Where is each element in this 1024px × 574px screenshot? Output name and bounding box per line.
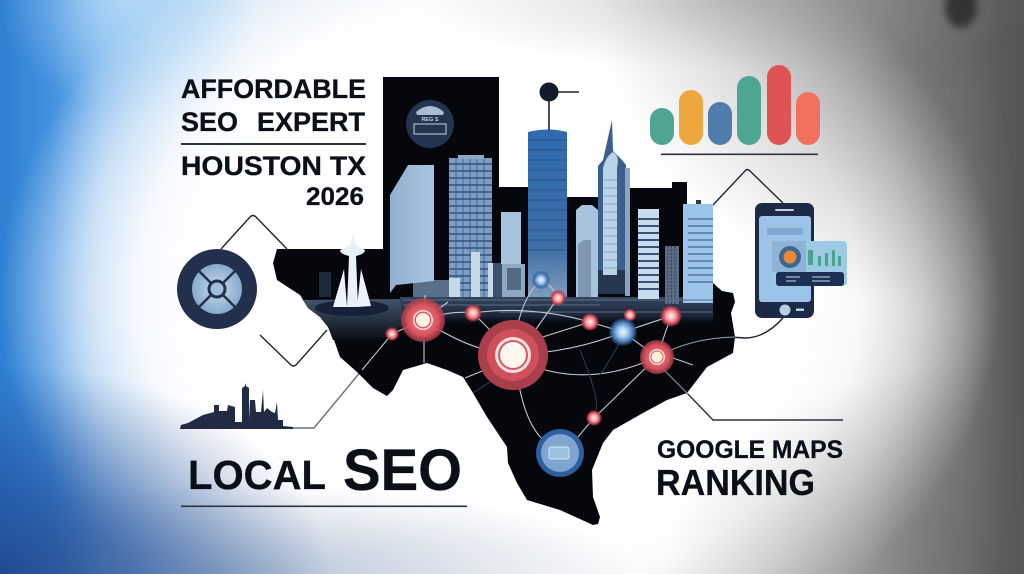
skyline buildings <box>319 82 713 312</box>
small tower <box>576 205 598 297</box>
heading: HOUSTON TX <box>181 151 366 181</box>
Google Maps ranking label: RANKING <box>656 462 815 503</box>
ground road <box>403 300 713 312</box>
network lines <box>362 280 735 445</box>
chart: coloured bars <box>650 65 820 155</box>
building left glass <box>390 165 434 293</box>
heading <box>181 74 366 211</box>
Google Maps ranking label: GOOGLE MAPS <box>657 436 843 464</box>
Google Maps ranking label <box>656 436 843 503</box>
low buildings <box>449 252 493 297</box>
local SEO label: LOCAL <box>188 452 326 498</box>
low slate blocks <box>413 280 449 297</box>
spire tower <box>598 120 630 296</box>
heading: AFFORDABLE <box>181 74 366 104</box>
app card <box>772 241 847 286</box>
connector lines <box>221 170 843 428</box>
city base haze <box>400 297 713 326</box>
phone icon <box>755 203 847 318</box>
node east <box>640 340 674 374</box>
background blocks <box>319 272 331 297</box>
small skyline silhouette <box>180 383 293 429</box>
smudge top right <box>945 0 977 28</box>
monument platform <box>303 299 404 340</box>
location badge node <box>536 429 584 477</box>
main blue tower <box>528 130 567 297</box>
heading: EXPERT <box>257 107 366 137</box>
small red nodes <box>385 290 682 426</box>
right building <box>683 200 713 303</box>
left target icon <box>177 249 257 329</box>
striped building <box>638 209 659 299</box>
building grid tower <box>449 155 492 297</box>
hub node <box>478 320 548 390</box>
heading: SEO <box>181 107 238 137</box>
monument <box>315 233 389 316</box>
local SEO label <box>181 438 467 507</box>
dark grid building <box>665 246 679 304</box>
blue nodes <box>532 271 637 346</box>
sign badge on panhandle: REG S <box>421 117 439 123</box>
heading: 2026 <box>306 183 364 211</box>
map of Texas <box>273 77 735 525</box>
sign badge on panhandle <box>406 100 454 148</box>
Texas silhouette <box>273 77 735 525</box>
local SEO label: SEO <box>343 438 462 503</box>
network nodes <box>385 271 682 477</box>
node north west <box>401 298 445 342</box>
antenna with ball <box>540 82 579 130</box>
